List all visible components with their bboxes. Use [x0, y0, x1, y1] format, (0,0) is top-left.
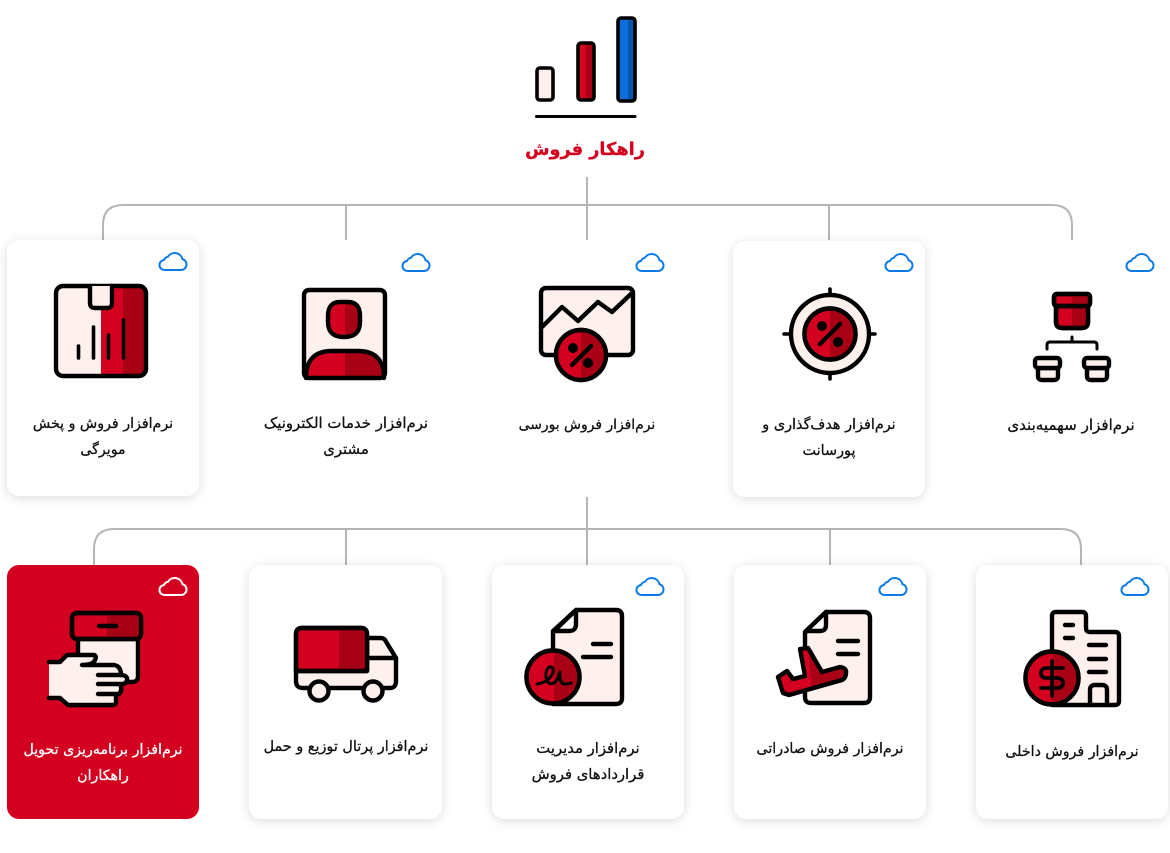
icon: cloud	[402, 253, 431, 272]
panel: target and percentage software	[733, 241, 925, 497]
panel: allocation software	[975, 240, 1167, 496]
label: نرم‌افزار خدمات الکترونیک	[264, 414, 428, 432]
label: نرم‌افزار فروش صادراتی	[757, 741, 903, 757]
label: قراردادهای فروش	[532, 766, 644, 783]
icon: hand holding box	[46, 610, 144, 708]
icon: cloud	[878, 577, 908, 596]
icon: delivery truck	[294, 626, 398, 703]
label	[762, 416, 896, 459]
label: نرم‌افزار مدیریت	[536, 740, 640, 757]
label: نرم‌افزار فروش بورسی	[519, 417, 655, 433]
icon: user profile	[302, 288, 388, 380]
panel: customer e-services software	[250, 240, 442, 496]
title: راهکار فروش	[525, 140, 645, 160]
icon: cloud	[1126, 253, 1155, 272]
icon: signed document	[524, 608, 624, 706]
label: نرم‌افزار هدف‌گذاری و	[762, 417, 896, 433]
label	[23, 742, 183, 784]
label: نرم‌افزار برنامه‌ریزی تحویل	[23, 742, 183, 758]
icon: cloud	[158, 252, 188, 271]
label: راهکاران	[77, 768, 129, 784]
icon: cloud	[1120, 577, 1150, 596]
panel: delivery planning software (highlighted)	[7, 565, 199, 819]
panel: contract management software	[492, 565, 684, 819]
icon: target with percent	[782, 287, 877, 381]
panel: export sales software	[734, 565, 926, 819]
label	[532, 740, 644, 783]
icon: cloud	[158, 577, 188, 596]
label: نرم‌افزار فروش داخلی	[1005, 744, 1139, 760]
icon: cloud	[884, 253, 914, 272]
label: مشتری	[323, 440, 369, 458]
icon: building with dollar coin	[1023, 610, 1122, 708]
icon: chart with percent	[538, 286, 636, 382]
panel: exchange sales software	[491, 240, 683, 496]
icon: document with airplane	[776, 610, 872, 706]
icon: cloud	[636, 253, 665, 272]
panel: domestic sales software	[976, 565, 1168, 819]
panel: distribution portal software	[249, 565, 442, 819]
icon: cloud	[636, 577, 664, 596]
icon: allocation tree	[1032, 292, 1112, 382]
label: نرم‌افزار سهمیه‌بندی	[1007, 416, 1135, 434]
label: نرم‌افزار فروش و پخش	[33, 416, 173, 432]
label	[33, 416, 173, 458]
panel: capillary distribution software	[7, 240, 199, 496]
icon: sales bar chart	[535, 16, 637, 118]
icon: package with bars	[54, 284, 148, 378]
label: نرم‌افزار پرتال توزیع و حمل	[264, 739, 428, 755]
label	[264, 414, 428, 458]
label: مویرگی	[80, 442, 126, 458]
label: پورسانت	[803, 443, 855, 459]
